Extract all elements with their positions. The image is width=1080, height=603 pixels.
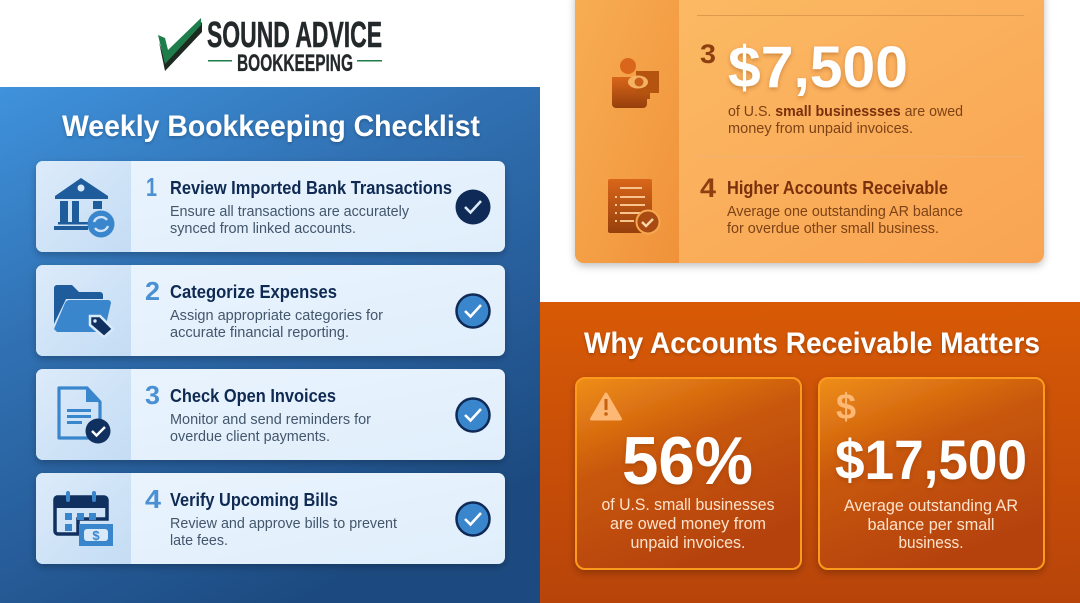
number 1: 1	[146, 172, 157, 202]
description 2	[170, 308, 383, 341]
card 1	[36, 161, 505, 252]
description 4: Review and approve bills to prevent	[170, 516, 397, 532]
description: owed money: money from unpaid invoices.	[728, 121, 913, 137]
icon: logo checkmark	[158, 18, 202, 71]
description 1: synced from linked accounts.	[170, 221, 356, 237]
description 3: overdue client payments.	[170, 429, 330, 445]
description: 56%: unpaid invoices.	[630, 534, 746, 552]
icon: bank with sync	[54, 178, 114, 238]
icon: calendar with money	[55, 491, 113, 546]
stat card: $17,500	[819, 378, 1044, 569]
description 2: Assign appropriate categories for	[170, 308, 383, 324]
number 4: 4	[700, 173, 716, 203]
description 4	[170, 516, 397, 549]
card 4	[36, 473, 505, 564]
description 3: Monitor and send reminders for	[170, 412, 371, 428]
description: 56%: are owed money from	[610, 515, 766, 533]
title 3: Check Open Invoices	[170, 386, 336, 406]
number 3: 3	[145, 380, 160, 410]
stat: $17,500: $17,500	[835, 428, 1027, 491]
check icon 3	[456, 398, 490, 432]
description 1	[170, 204, 410, 237]
description: AR balance: Average one outstanding AR balance	[727, 204, 963, 220]
number 3: 3	[700, 39, 716, 69]
description: owed money: of U.S. small businessses are owed	[728, 104, 963, 120]
title 1: Review Imported Bank Transactions	[170, 178, 452, 198]
description: 56%: of U.S. small businesses	[602, 496, 774, 514]
description: owed money	[728, 104, 963, 137]
description: $17,500: Average outstanding AR	[844, 497, 1018, 515]
check icon 2	[456, 294, 490, 328]
check icon 4	[456, 502, 490, 536]
icon: person with money	[612, 58, 659, 108]
description: $17,500: business.	[898, 534, 964, 552]
panel: weekly checklist	[0, 87, 540, 603]
heading: why AR matters: Why Accounts Receivable Matters	[584, 327, 1040, 360]
description: 56%	[602, 496, 774, 552]
description 2: accurate financial reporting.	[170, 325, 349, 341]
number 2: 2	[145, 276, 160, 306]
check icon 1	[456, 190, 490, 224]
description: AR balance	[727, 204, 963, 237]
number 4: 4	[145, 484, 162, 514]
panel: orange statistics card	[575, 0, 1044, 263]
description: AR balance: for overdue other small business.	[727, 221, 939, 237]
heading: weekly checklist: Weekly Bookkeeping Checklist	[62, 110, 480, 143]
logo subline: BOOKKEEPING	[237, 50, 353, 77]
stat card: 56%	[576, 378, 801, 569]
card 2	[36, 265, 505, 356]
description 3	[170, 412, 371, 445]
description 1: Ensure all transactions are accurately	[170, 204, 410, 220]
icon: report with check	[608, 179, 660, 234]
icon: folder with tag	[54, 285, 113, 337]
description: $17,500: balance per small	[868, 516, 994, 534]
title 2: Categorize Expenses	[170, 282, 337, 302]
logo	[158, 14, 382, 77]
card 3	[36, 369, 505, 460]
description 4: late fees.	[170, 533, 228, 549]
logo wordmark: SOUND ADVICE	[207, 14, 382, 55]
stat: $7,500: $7,500	[728, 35, 908, 100]
icon: document with check	[59, 388, 110, 444]
icon: dollar sign: $	[836, 386, 856, 427]
icon: warning	[592, 394, 620, 419]
panel: why accounts receivable matters	[540, 302, 1080, 603]
icon: calendar with money: $	[92, 528, 100, 543]
stat: 56%: 56%	[622, 423, 753, 499]
title: higher accounts receivable: Higher Accounts Receivable	[727, 178, 948, 198]
title 4: Verify Upcoming Bills	[170, 490, 338, 510]
description: $17,500	[844, 497, 1018, 552]
